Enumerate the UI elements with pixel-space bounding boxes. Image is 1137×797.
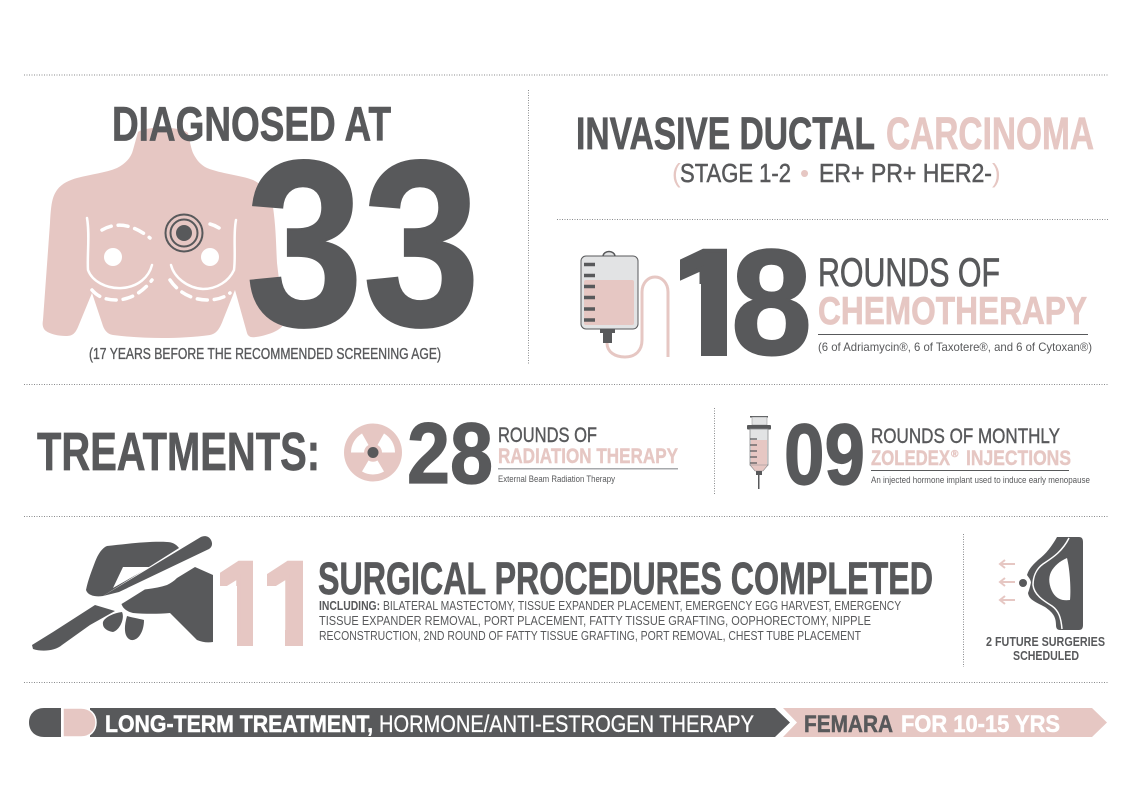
icon: hand holding scalpel <box>32 536 213 651</box>
text: femara duration: FEMARA <box>804 711 893 738</box>
banner: long-term treatment <box>29 708 1107 738</box>
label: rounds of monthly: ROUNDS OF MONTHLY <box>871 425 1060 448</box>
icon: IV bag <box>581 252 668 357</box>
pill bar <box>29 708 790 737</box>
panel: surgeries <box>32 536 1105 670</box>
text: femara duration: FOR 10-15 YRS <box>901 711 1060 738</box>
big number: 18: 1 <box>654 218 769 386</box>
text: list of procedures: TISSUE EXPANDER REMOVAL, PORT PLACEMENT, FATTY TISSUE GRAFTING, OOPHORECTOMY, NIPPLE <box>319 614 871 628</box>
big number: 11 <box>211 538 330 670</box>
panel: diagnosis <box>43 98 480 376</box>
icon: syringe <box>747 416 771 489</box>
note: external beam: External Beam Radiation Therapy <box>498 474 615 484</box>
heading: invasive ductal carcinoma: INVASIVE DUCTAL <box>576 108 875 159</box>
big number: 28: 28 <box>407 406 493 502</box>
subheading: stage and receptors: • <box>800 158 809 188</box>
icon: radiation symbol <box>344 424 402 482</box>
arrow: femara <box>783 708 1107 737</box>
subheading: stage and receptors: ) <box>992 158 1001 188</box>
text: long-term treatment: LONG-TERM TREATMENT, <box>105 711 373 738</box>
big number: 18 <box>646 218 812 386</box>
text: list of procedures: RECONSTRUCTION, 2ND ROUND OF FATTY TISSUE GRAFTING, PORT REMOVAL, CHEST TUBE PLACEMENT <box>319 629 861 643</box>
panel: zoledex <box>747 407 1090 503</box>
label: zoledex injections: ZOLEDEX <box>871 447 950 470</box>
label: radiation therapy: RADIATION THERAPY <box>498 445 678 468</box>
label: rounds of: ROUNDS OF <box>498 424 597 447</box>
big number: 09: 09 <box>784 407 865 503</box>
subheading: stage and receptors: STAGE 1-2 <box>680 158 791 188</box>
note: implant: An injected hormone implant used to induce early menopause <box>871 475 1090 485</box>
panel: chemotherapy <box>581 218 1092 386</box>
text: long-term treatment: HORMONE/ANTI-ESTROGEN THERAPY <box>379 711 754 738</box>
note: chemotherapy drugs: (6 of Adriamycin®, 6 of Taxotere®, and 6 of Cytoxan®) <box>818 340 1092 354</box>
big number: 11: 1 <box>211 538 276 670</box>
label: zoledex injections: INJECTIONS <box>966 447 1071 470</box>
label: future surgeries: 2 FUTURE SURGERIES <box>986 635 1105 649</box>
label: rounds of: ROUNDS OF <box>818 251 1000 295</box>
label: future surgeries: SCHEDULED <box>1013 649 1079 663</box>
panel: radiation <box>344 406 678 502</box>
icon: torso with surgical marks <box>43 128 284 338</box>
big number: 18: 8 <box>731 218 812 386</box>
big number: 11: 1 <box>260 538 325 670</box>
caption: screening age: (17 YEARS BEFORE THE RECOMMENDED SCREENING AGE) <box>89 346 441 363</box>
label: zoledex injections: ® <box>951 449 959 460</box>
big number: 33: 33 <box>246 112 480 376</box>
heading: treatments: TREATMENTS: <box>37 422 320 482</box>
heading: diagnosed at: DIAGNOSED AT <box>112 98 391 152</box>
icon: breast implant <box>1000 537 1083 630</box>
text: list of procedures: INCLUDING: BILATERAL MASTECTOMY, TISSUE EXPANDER PLACEMENT, EMERGENCY EGG HARVEST, EMERGENCY <box>319 599 1008 613</box>
subheading: stage and receptors: ER+ PR+ HER2- <box>819 158 992 188</box>
subheading: stage and receptors: ( <box>672 158 681 188</box>
panel: carcinoma heading <box>576 108 1094 188</box>
